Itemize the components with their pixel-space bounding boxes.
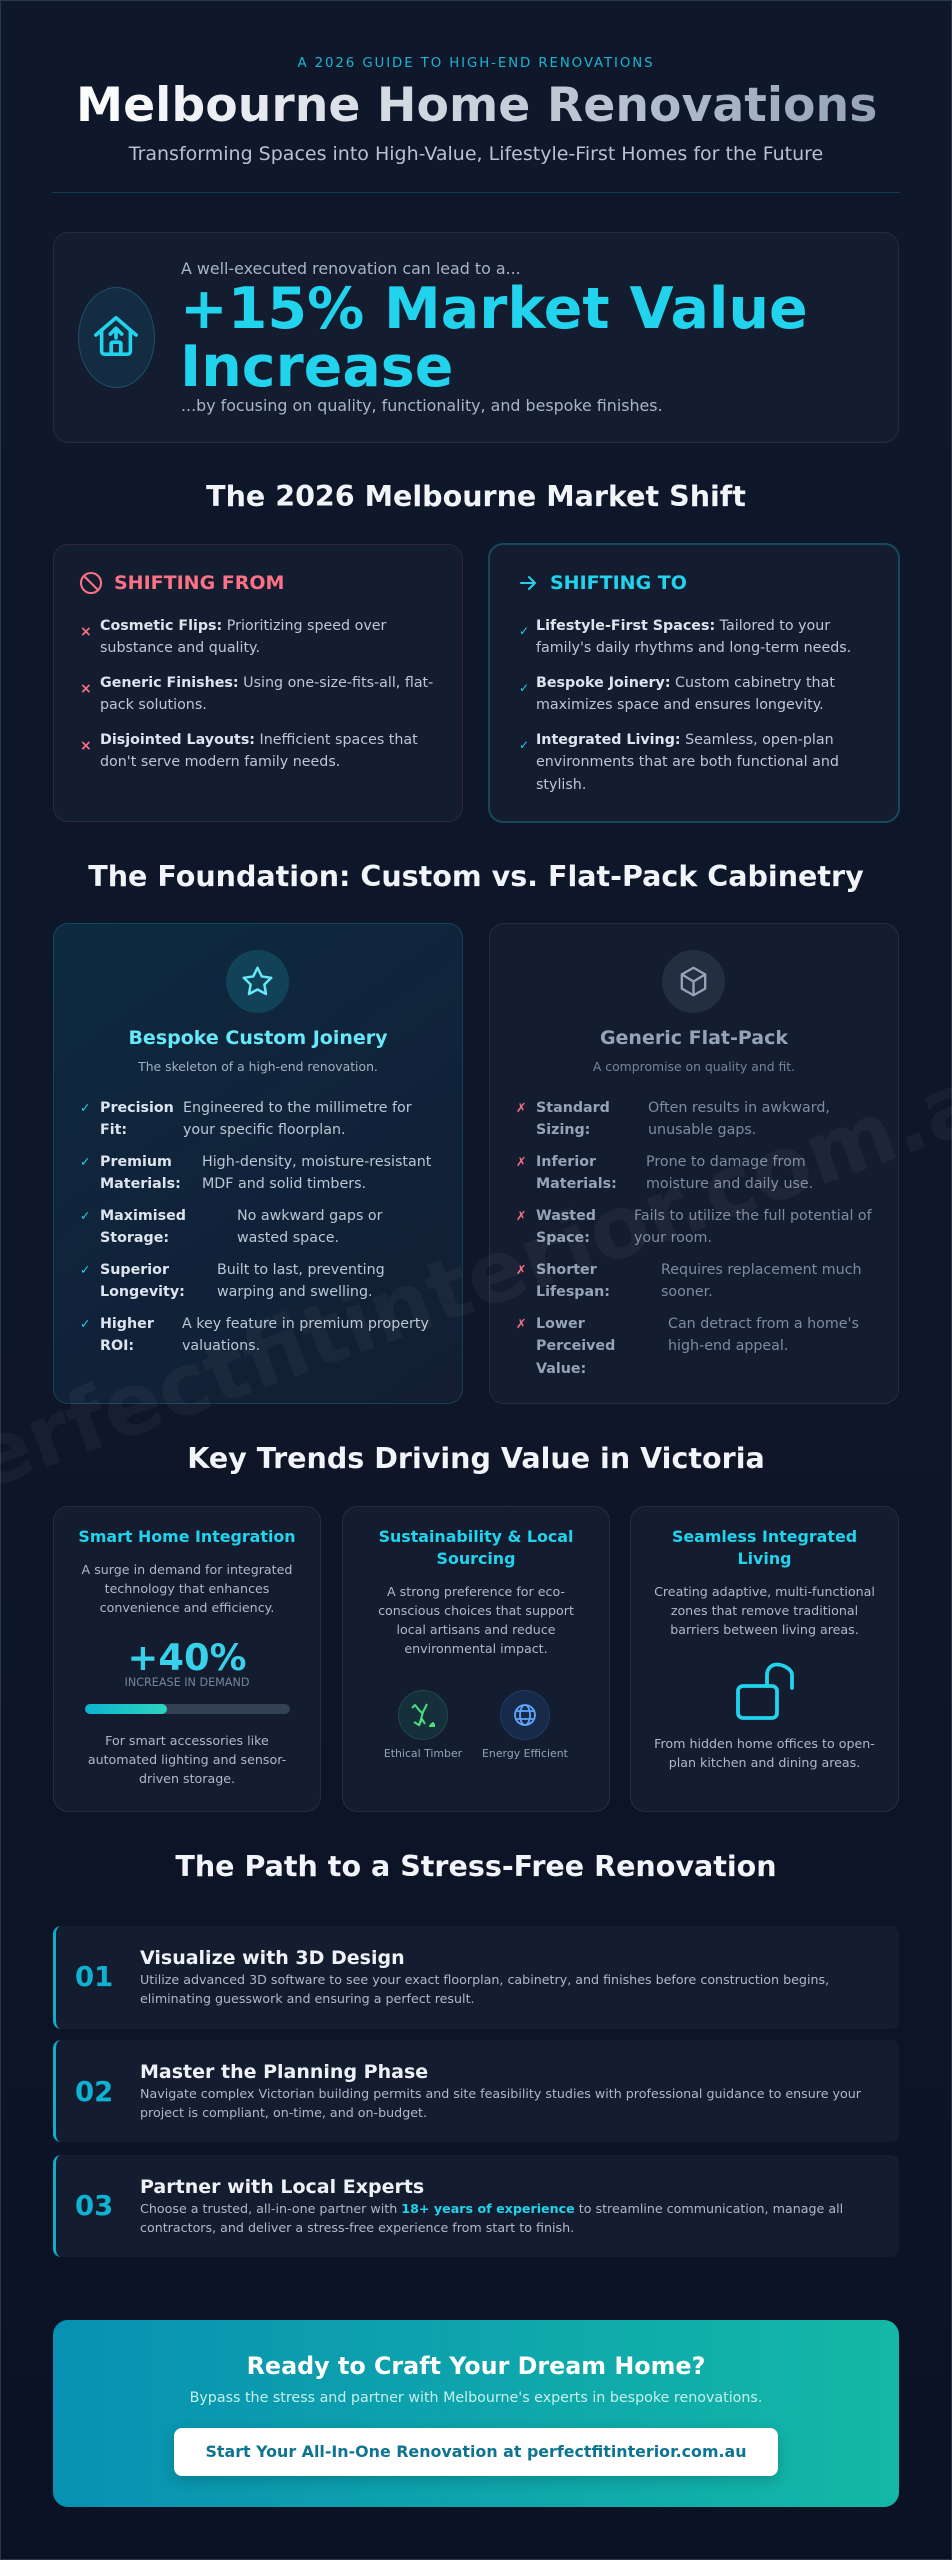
item: precision fit: Fit: [100,1122,127,1138]
trend title: Smart Home Integration [78,1527,296,1546]
item: lower perceived value: Lower [536,1316,585,1332]
title: Melbourne Home Renovations [76,78,877,133]
step number: 03 [75,2190,113,2222]
item: inferior materials [516,1154,813,1192]
to heading: SHIFTING TO [550,572,687,594]
item: lifestyle-first [519,618,851,656]
panel: seamless integrated living [630,1506,899,1812]
item: superior longevity: Built to last, preventing [217,1262,385,1278]
trend title: Sourcing [437,1549,515,1568]
progress fill [85,1704,167,1714]
panel: shifting to [488,543,900,823]
item: lower perceived value: high-end appeal. [668,1338,788,1354]
step title: Master the Planning Phase [140,2061,428,2083]
item: superior longevity [80,1262,385,1300]
trend description: A strong preference for eco- [387,1584,565,1599]
item: generic finishes: Generic Finishes: Using one-size-fits-all, flat- [100,675,433,691]
cta heading: Ready to Craft Your Dream Home? [247,2352,705,2380]
item: precision fit [80,1100,412,1138]
item: cosmetic flips [80,618,386,656]
trend description: zones that remove traditional [671,1603,858,1618]
trend description: convenience and efficiency. [100,1600,274,1615]
step description [140,2086,861,2120]
trend title: Living [738,1549,791,1568]
item: shorter lifespan: Shorter [536,1262,597,1278]
item: inferior materials: Prone to damage from [646,1154,806,1170]
item: standard sizing [516,1100,830,1138]
item: integrated living: environments that are both functional and [536,754,839,770]
icon: box [662,950,725,1013]
item: lower perceived value: Perceived [536,1338,615,1354]
trend description: Creating adaptive, multi-functional [654,1584,875,1599]
panel: smart home integration [53,1506,321,1812]
panel: generic flat-pack [489,923,899,1404]
trend description: A surge in demand for integrated [82,1562,292,1577]
item: standard sizing: Often results in awkward, [648,1100,830,1116]
icon: arrow right [520,576,536,590]
item: maximised storage: Maximised [100,1208,186,1224]
drawback list: Value: [536,1361,586,1377]
trend footnote: automated lighting and sensor- [88,1752,286,1767]
item: inferior materials: Inferior [536,1154,596,1170]
item: maximised storage: Storage: [100,1230,169,1246]
item: higher roi: ✓ [80,1316,90,1331]
trend description: technology that enhances [105,1581,269,1596]
item: superior longevity: Longevity: [100,1284,185,1300]
benefit list [80,1100,431,1354]
item: higher roi [80,1316,429,1354]
trend footnote: From hidden home offices to open- [654,1736,875,1751]
card subtitle: A compromise on quality and fit. [593,1059,795,1074]
step title: Partner with Local Experts [140,2176,424,2198]
item: shorter lifespan: Requires replacement much [661,1262,862,1278]
panel: sustainability [342,1506,610,1812]
item: wasted space: Space: [536,1230,590,1246]
icon: prohibited [80,572,102,594]
heading: foundation: The Foundation: Custom vs. Flat-Pack Cabinetry [88,859,864,893]
item: premium materials: Premium [100,1154,172,1170]
item: generic finishes [80,675,433,713]
trend description: local artisans and reduce [396,1622,556,1637]
step description: Choose a trusted, all-in-one partner with 18+ years of experience to streamline communication, manage all [140,2201,843,2216]
item: disjointed layouts: Disjointed Layouts: Inefficient spaces that [100,732,418,748]
item: standard sizing: ✗ [516,1100,526,1115]
item: wasted space: ✗ [516,1208,526,1223]
item: integrated living: Integrated Living: Seamless, open-plan [536,732,834,748]
item: lower perceived value [516,1316,859,1377]
badge: ethical timber [384,1690,462,1760]
heading: key trends: Key Trends Driving Value in Victoria [187,1441,765,1475]
item: shorter lifespan: sooner. [661,1284,713,1300]
trend description: barriers between living areas. [670,1622,859,1637]
trend footnote [654,1736,875,1770]
item: generic finishes: × [80,681,92,697]
item: premium materials: ✓ [80,1154,90,1169]
card title: Generic Flat-Pack [600,1027,788,1049]
item: lower perceived value: ✗ [516,1316,526,1331]
trend title [672,1527,857,1568]
trend description [378,1584,574,1656]
icon: star [226,950,289,1013]
heading: market shift: The 2026 Melbourne Market Shift [206,479,746,513]
statistic +40%: +40% [128,1636,246,1679]
badge label: Energy Efficient [482,1747,568,1760]
item: higher roi: valuations. [182,1338,260,1354]
item: wasted space [516,1208,872,1246]
panel: shifting from [53,544,463,822]
item: shorter lifespan: Lifespan: [536,1284,610,1300]
item: cosmetic flips: Cosmetic Flips: Prioritizing speed over [100,618,386,634]
item: bespoke joinery: maximizes space and ensures longevity. [536,697,824,713]
step description [140,2201,843,2235]
statistic caption: INCREASE IN DEMAND [125,1676,249,1689]
item: bespoke joinery: Bespoke Joinery: Custom cabinetry that [536,675,835,691]
item: integrated living: stylish. [536,777,586,793]
item: wasted space: Wasted [536,1208,596,1224]
item: disjointed layouts [80,732,418,770]
from heading: SHIFTING FROM [114,572,284,594]
subtitle: Transforming Spaces into High-Value, Lifestyle-First Homes for the Future [129,143,823,165]
item: inferior materials: ✗ [516,1154,526,1169]
panel: market value hero [53,232,899,443]
item: wasted space: Fails to utilize the full potential of [634,1208,872,1224]
hero statistic: +15% Market Value [180,276,808,342]
hero statistic: Increase [180,334,453,400]
trend title: Sustainability & Local [379,1527,573,1546]
hero closing text: ...by focusing on quality, functionality, and bespoke finishes. [181,396,663,415]
kicker: A 2026 GUIDE TO HIGH-END RENOVATIONS [298,56,654,71]
icon: house with arrow [78,287,155,388]
hero intro text: A well-executed renovation can lead to a... [181,259,521,278]
item: lower perceived value: Can detract from a home's [668,1316,859,1332]
step description: contractors, and deliver a stress-free experience from start to finish. [140,2220,574,2235]
drawback list [516,1100,872,1377]
cta button [174,2428,778,2476]
trend description [82,1562,292,1615]
item: precision fit: Precision [100,1100,174,1116]
step 1 [53,1926,899,2029]
item: bespoke joinery [519,675,835,713]
icon: open lock [736,1662,794,1720]
item: premium materials [80,1154,431,1192]
item: standard sizing: Standard [536,1100,610,1116]
step description [140,1972,829,2006]
item: higher roi: ROI: [100,1338,134,1354]
item: maximised storage: No awkward gaps or [237,1208,382,1224]
item: integrated living [519,732,839,793]
item: inferior materials: Materials: [536,1176,617,1192]
item: superior longevity: ✓ [80,1262,90,1277]
badge: energy efficient [482,1690,568,1760]
step description: Navigate complex Victorian building permits and site feasibility studies with professional guidance to ensure your [140,2086,861,2101]
panel: bespoke custom joinery [53,923,463,1404]
item: standard sizing: unusable gaps. [648,1122,756,1138]
trend footnote: For smart accessories like [105,1733,269,1748]
item: premium materials: Materials: [100,1176,181,1192]
icon: globe [500,1690,550,1740]
trend description [654,1584,875,1637]
item: bespoke joinery: ✓ [519,681,529,695]
step title: Visualize with 3D Design [140,1947,405,1969]
trend title [379,1527,573,1568]
item: higher roi: A key feature in premium property [182,1316,429,1332]
trend title: Seamless Integrated [672,1527,857,1546]
item: premium materials: MDF and solid timbers. [202,1176,366,1192]
trend description: conscious choices that support [378,1603,574,1618]
item: lifestyle-first: ✓ [519,624,529,638]
item: maximised storage: wasted space. [237,1230,339,1246]
item: shorter lifespan: ✗ [516,1262,526,1277]
item: maximised storage: ✓ [80,1208,90,1223]
item: superior longevity: warping and swelling. [217,1284,373,1300]
item: precision fit: ✓ [80,1100,90,1115]
item: integrated living: ✓ [519,738,529,752]
item: precision fit: Engineered to the millimetre for [183,1100,412,1116]
item: lifestyle-first: family's daily rhythms and long-term needs. [536,640,851,656]
from list [80,618,433,770]
button label: Start Your All-In-One Renovation at perfectfitinterior.com.au [205,2442,746,2461]
step description: eliminating guesswork and ensuring a perfect result. [140,1991,475,2006]
item: standard sizing: Sizing: [536,1122,590,1138]
item: lifestyle-first: Lifestyle-First Spaces: Tailored to your [536,618,830,634]
step 2 [53,2040,899,2142]
to list [519,618,851,793]
item: cosmetic flips: substance and quality. [100,640,260,656]
step number: 01 [75,1961,113,1993]
item: precision fit: your specific floorplan. [183,1122,346,1138]
icon: timber [398,1690,448,1740]
item: higher roi: Higher [100,1316,154,1332]
cta subtext: Bypass the stress and partner with Melbourne's experts in bespoke renovations. [190,2390,762,2406]
hero statistic [180,276,808,400]
card subtitle: The skeleton of a high-end renovation. [138,1059,378,1074]
item: superior longevity: Superior [100,1262,169,1278]
item: premium materials: High-density, moisture-resistant [202,1154,431,1170]
item: cosmetic flips: × [80,624,92,640]
step description: Utilize advanced 3D software to see your exact floorplan, cabinetry, and finishes before construction begins, [140,1972,829,1987]
item: disjointed layouts: don't serve modern family needs. [100,754,340,770]
trend footnote: plan kitchen and dining areas. [669,1755,860,1770]
heading: path: The Path to a Stress-Free Renovation [175,1849,777,1883]
item: wasted space: your room. [634,1230,712,1246]
trend description: environmental impact. [404,1641,548,1656]
step 3 [53,2155,899,2257]
item: maximised storage [80,1208,382,1246]
badge label: Ethical Timber [384,1747,462,1760]
item: inferior materials: moisture and daily use. [646,1176,813,1192]
trend footnote [88,1733,286,1786]
card title: Bespoke Custom Joinery [128,1027,388,1049]
step number: 02 [75,2076,113,2108]
item: generic finishes: pack solutions. [100,697,207,713]
progress bar [85,1704,290,1714]
trend footnote: driven storage. [139,1771,235,1786]
item: disjointed layouts: × [80,738,92,754]
panel: call to action [53,2320,899,2507]
item: shorter lifespan [516,1262,862,1300]
step description: project is compliant, on-time, and on-budget. [140,2105,427,2120]
